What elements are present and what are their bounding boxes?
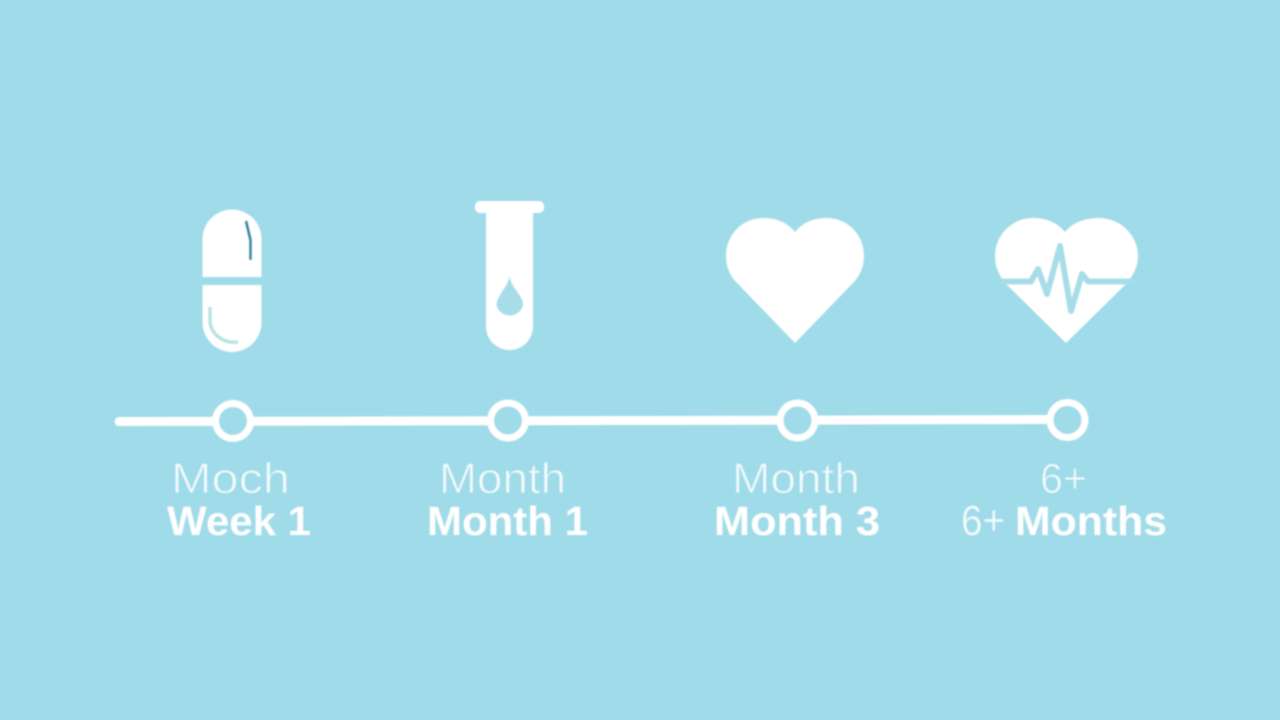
label: 6+ months: Months <box>1015 498 1167 544</box>
label: week 1 <box>167 455 311 544</box>
milestone marker: week 1 <box>216 404 250 438</box>
label: month 1: Month 1 <box>427 498 588 544</box>
label: 6+ months <box>961 455 1167 545</box>
label: month 3: Month <box>732 455 860 503</box>
icon: heart with heartbeat <box>995 218 1138 343</box>
milestone marker: 6+ months <box>1050 402 1085 438</box>
milestone marker: month 1 <box>490 403 526 438</box>
label: 6+ months: 6+ <box>961 497 1005 545</box>
milestone marker: month 3 <box>780 403 815 438</box>
label: week 1: Moch <box>171 455 290 503</box>
label: week 1: Week 1 <box>167 498 311 544</box>
label: month 1: Month <box>439 455 566 503</box>
icon: heart <box>726 218 864 343</box>
infographic: treatment timeline <box>119 201 1167 545</box>
icon: capsule <box>202 210 262 352</box>
label: month 1 <box>427 455 588 544</box>
timeline axis <box>119 402 1085 438</box>
label: month 3 <box>714 455 880 544</box>
label: 6+ months: 6+ <box>1040 455 1087 503</box>
label: month 3: Month 3 <box>714 498 880 544</box>
icon: test tube with drop <box>475 201 544 350</box>
